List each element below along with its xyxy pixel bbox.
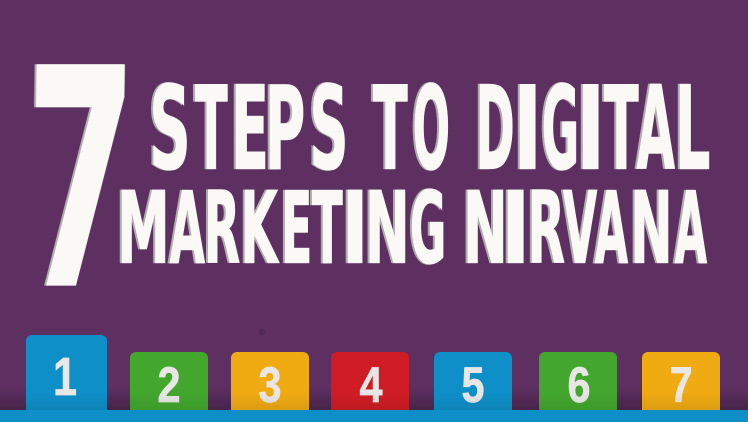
title line 2: MARKETING NIRVANA: I	[341, 172, 369, 286]
title line 2: MARKETING NIRVANA: G	[410, 172, 446, 286]
step tab 4: 4	[360, 357, 383, 413]
title line 1: STEPS TO DIGITAL: E	[231, 62, 269, 196]
step tab 7: 7	[670, 357, 692, 413]
step tab 2	[130, 352, 208, 413]
title line 2: MARKETING NIRVANA: N	[365, 172, 410, 286]
title line 1: STEPS TO DIGITAL: I	[513, 62, 542, 196]
tab bottom shading	[0, 392, 748, 410]
title line 1: STEPS TO DIGITAL: D	[476, 62, 515, 196]
title line 2: MARKETING NIRVANA: I	[501, 172, 530, 286]
title line 1: STEPS TO DIGITAL: I	[576, 62, 605, 196]
title line 1: STEPS TO DIGITAL: A	[637, 62, 675, 196]
step tab 3: 3	[258, 357, 282, 413]
title line 1: STEPS TO DIGITAL: P	[265, 62, 305, 196]
title line 1: STEPS TO DIGITAL: O	[413, 62, 450, 196]
text: L	[675, 62, 710, 196]
step tab 5	[434, 352, 512, 413]
title line 2: MARKETING NIRVANA: R	[528, 172, 565, 286]
shadow above the base bar	[0, 385, 748, 410]
title line 2: MARKETING NIRVANA: T	[312, 172, 343, 286]
title line 1: STEPS TO DIGITAL: S	[149, 62, 191, 196]
title line 2: MARKETING NIRVANA: E	[281, 172, 312, 286]
step tab 2: 2	[158, 357, 180, 413]
title line 2: MARKETING NIRVANA	[117, 172, 707, 286]
step tab 3	[231, 352, 309, 413]
step tab 4	[331, 352, 409, 413]
title line 1: STEPS TO DIGITAL: T	[604, 62, 639, 196]
step tab 5: 5	[462, 357, 484, 413]
title line 1: STEPS TO DIGITAL: S	[310, 62, 348, 196]
step tab 6	[539, 352, 617, 413]
dark speck on background	[258, 328, 266, 336]
title line 2: MARKETING NIRVANA: K	[241, 172, 279, 286]
title line 2: MARKETING NIRVANA: N	[630, 172, 673, 286]
step tab 6: 6	[568, 357, 590, 413]
title line 1: STEPS TO DIGITAL	[149, 62, 710, 196]
title line 2: MARKETING NIRVANA: A	[595, 172, 628, 286]
step tab 7	[642, 352, 720, 413]
title line 1: STEPS TO DIGITAL: T	[373, 62, 408, 196]
title line 2: MARKETING NIRVANA: A	[170, 172, 205, 286]
big numeral 7: 7	[22, 6, 138, 357]
title line 2: MARKETING NIRVANA: N	[463, 172, 508, 286]
title line 2: MARKETING NIRVANA: V	[563, 172, 597, 286]
step tab 1	[26, 335, 107, 410]
title line 2: MARKETING NIRVANA: R	[204, 172, 240, 286]
title line 2: MARKETING NIRVANA: M	[117, 172, 170, 286]
title line 1: STEPS TO DIGITAL: T	[195, 62, 228, 196]
step tab 1: 1	[53, 347, 77, 407]
blue base bar	[0, 410, 748, 422]
title line 1: STEPS TO DIGITAL: G	[542, 62, 579, 196]
